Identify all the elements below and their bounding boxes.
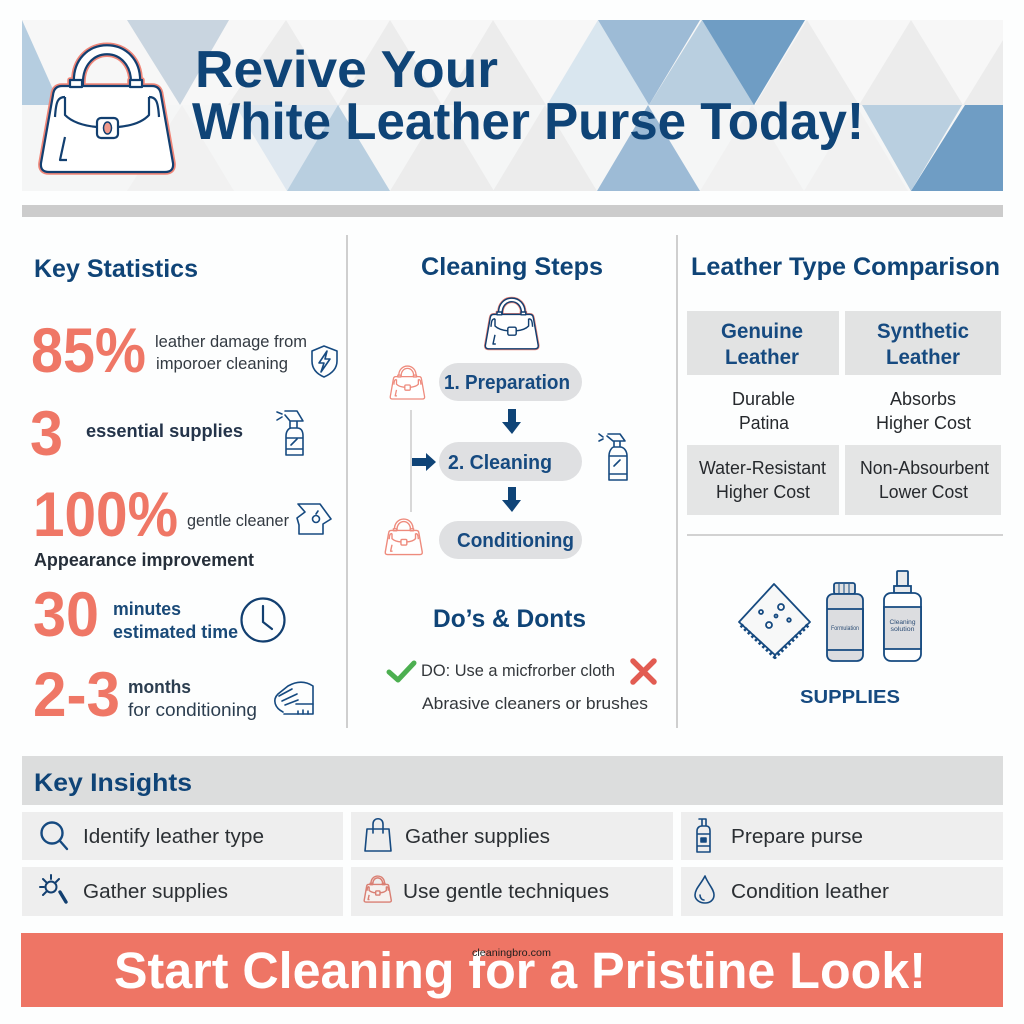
insight: gather supplies: Gather supplies (405, 826, 550, 848)
icon: hand with cloth (275, 682, 313, 714)
table: genuine header: Genuine (721, 320, 803, 343)
stat: 3 supplies: essential supplies (86, 421, 243, 441)
grey separator bar (22, 205, 1003, 217)
stat: 2-3 months: 2-3 (33, 660, 120, 730)
watermark: cleaningbro.com (472, 947, 551, 959)
icon: clock (242, 598, 284, 642)
stat: 30 minutes: minutes (113, 599, 181, 619)
table: genuine pros: Patina (739, 413, 790, 433)
stat: 100% (33, 480, 331, 570)
stat: 3 supplies: 3 (30, 399, 63, 469)
table: genuine details: Water-Resistant (699, 458, 826, 478)
title: White Leather Purse Today! (192, 93, 864, 151)
supplies label: SUPPLIES (800, 686, 900, 707)
icon: cleaner bottle: Formulation (831, 625, 859, 632)
icon: purse (485, 298, 538, 349)
panel: leather type comparison (687, 253, 1003, 707)
stat: 100%: gentle cleaner (187, 511, 289, 530)
title: Revive Your (195, 41, 498, 99)
insight: condition leather: Condition leather (731, 881, 889, 903)
icon: white leather purse (41, 45, 173, 172)
stat: 100%: 100% (33, 480, 178, 550)
connector line (410, 410, 412, 512)
title (192, 41, 864, 151)
insight: gather supplies: Gather supplies (83, 881, 228, 903)
icon: microfiber cloth (739, 584, 810, 657)
arrow: step 2 to 3 (502, 487, 521, 512)
do text: DO: Use a micfrorber cloth (421, 662, 615, 680)
icon: spray bottle (277, 411, 303, 455)
insight: use gentle techniques (351, 867, 673, 916)
insight: gather supplies (351, 812, 673, 860)
step 1 pill: 1. Preparation (444, 372, 570, 394)
icon: cross (633, 661, 654, 682)
stat: 85% (31, 316, 337, 386)
icon: spray bottle (599, 434, 627, 480)
table: genuine header (687, 311, 839, 375)
table: genuine details (687, 445, 839, 515)
don't text: Abrasive cleaners or brushes (422, 694, 648, 713)
insight: condition leather (681, 867, 1003, 916)
stat: 2-3 months: months (128, 677, 191, 697)
step 2 pill (439, 442, 582, 481)
icon: spray bottle (884, 571, 921, 661)
step 2 pill: 2. Cleaning (448, 452, 552, 474)
header banner (22, 20, 1003, 191)
table: synthetic header: Synthetic (877, 320, 969, 343)
stat: 100%: Appearance improvement (34, 550, 254, 570)
step 1 pill (439, 363, 582, 401)
arrow: step 1 to 2 (502, 409, 521, 434)
table: synthetic pros (876, 389, 971, 433)
table: synthetic header: Leather (886, 346, 960, 369)
table: synthetic details (845, 445, 1001, 515)
table: synthetic details: Non-Absourbent (860, 458, 989, 478)
call to action banner (21, 933, 1003, 1007)
heading: cleaning steps: Cleaning Steps (421, 253, 603, 281)
table: synthetic pros: Absorbs (890, 389, 956, 409)
step 3 pill (439, 521, 582, 559)
table: genuine pros: Durable (732, 389, 795, 409)
table: synthetic header (845, 311, 1001, 375)
table: genuine header: Leather (725, 346, 799, 369)
icon: small red purse (390, 366, 425, 399)
call to action banner: Start Cleaning for a Pristine Look! (114, 942, 926, 999)
insight: prepare purse: Prepare purse (731, 826, 863, 848)
insight: gather supplies (22, 867, 343, 916)
key insights heading band: Key Insights (34, 769, 192, 797)
stat: 85%: 85% (31, 316, 146, 386)
stat: 85%: imporoer cleaning (156, 354, 288, 373)
step 3 pill: Conditioning (457, 530, 574, 552)
heading: leather type comparison: Leather Type Comparison (691, 253, 1000, 281)
table: genuine details: Higher Cost (716, 482, 810, 502)
panel: key insights (22, 756, 1003, 916)
heading: do's and don'ts: Do’s & Donts (433, 605, 586, 633)
icon: cloth (297, 504, 331, 534)
icon: check mark (389, 663, 414, 680)
icon: shield (312, 346, 337, 377)
icon: spray bottle: solution (890, 627, 914, 633)
insight: use gentle techniques: Use gentle techniques (403, 881, 609, 903)
table: synthetic pros: Higher Cost (876, 413, 971, 433)
insight: identify leather type: Identify leather type (83, 826, 264, 848)
icon: small red purse (385, 519, 422, 555)
stat: 85%: leather damage from (155, 332, 307, 351)
panel: key statistics (30, 255, 337, 730)
table: synthetic details: Lower Cost (879, 482, 968, 502)
insight: identify leather type (22, 812, 343, 860)
stat: 30 minutes: 30 (33, 580, 99, 650)
stat: 30 minutes: estimated time (113, 622, 238, 642)
table: genuine pros (732, 389, 795, 433)
stat: 3 supplies (30, 399, 303, 469)
icon: cleaner bottle (827, 583, 863, 661)
stat: 2-3 months: for conditioning (128, 700, 257, 720)
stat: 30 minutes (33, 580, 284, 650)
arrow: into step 2 (412, 453, 436, 471)
banner background pattern (22, 20, 1003, 191)
heading: key statistics: Key Statistics (34, 255, 198, 283)
icon: spray bottle: Cleaning (890, 620, 916, 626)
insight: prepare purse (681, 812, 1003, 860)
key insights heading band (22, 756, 1003, 805)
panel: cleaning steps (385, 253, 654, 713)
stat: 2-3 months (33, 660, 313, 730)
